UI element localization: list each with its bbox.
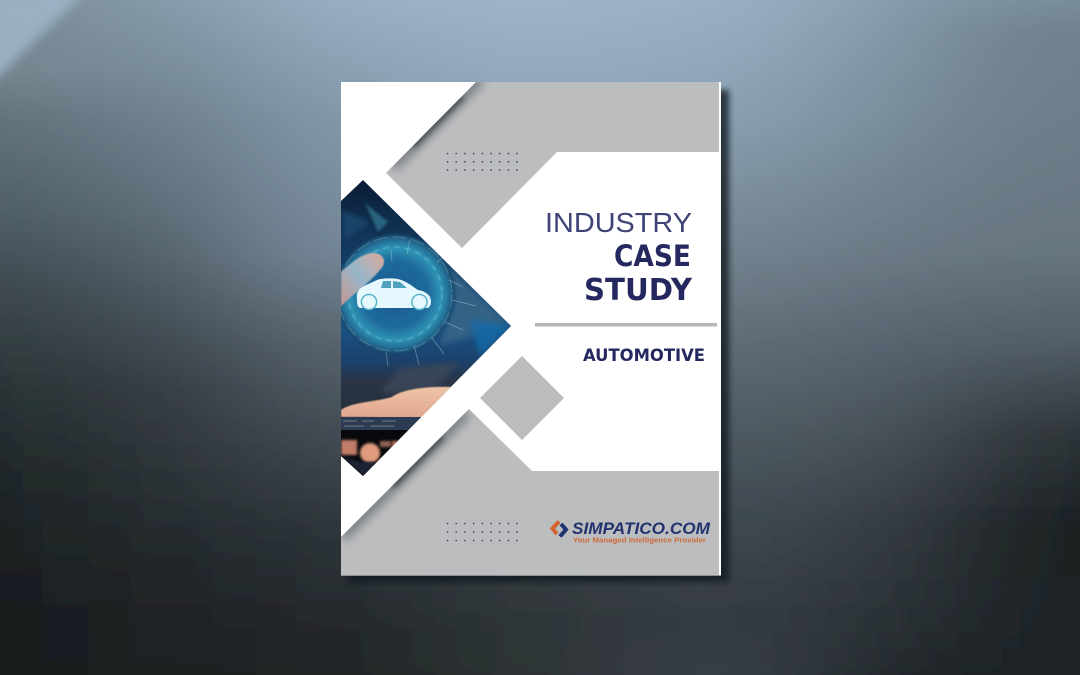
logo: simpatico.com (552, 519, 711, 544)
panel: bottom grey shape (341, 409, 719, 575)
logo wordmark: SIMPATICO.COM (572, 519, 711, 538)
booklet cover page (334, 78, 721, 576)
title: industry case study: STUDY (584, 273, 693, 308)
hand (341, 387, 452, 418)
subtitle: automotive: AUTOMOTIVE (583, 346, 705, 365)
hologram rings (334, 233, 476, 366)
icon: car (357, 278, 431, 310)
divider bar (535, 323, 717, 326)
title: industry case study: INDUSTRY (545, 207, 692, 238)
logo tagline: Your Managed Intelligence Provider (573, 538, 706, 544)
phone (341, 417, 422, 476)
title: industry case study: CASE (614, 239, 691, 273)
panel: top grey shape (386, 78, 719, 248)
dot grid: bottom (447, 523, 518, 541)
booklet drop shadow (349, 90, 729, 582)
icon: logo chevrons (552, 522, 566, 536)
finger (341, 253, 384, 306)
title: industry case study (545, 207, 693, 308)
dot grid: top (447, 153, 518, 171)
panel: small grey diamond (480, 356, 564, 440)
panel: photo diamond with car hologram (334, 180, 511, 476)
fingers under phone (341, 440, 402, 476)
